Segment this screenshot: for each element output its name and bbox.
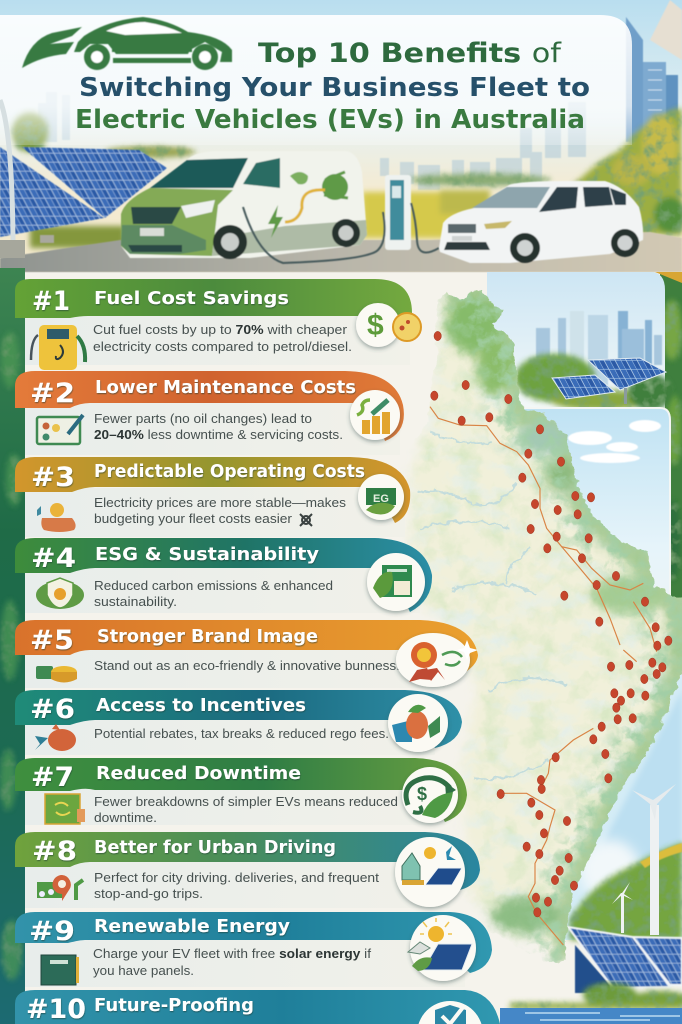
route line [430, 407, 657, 945]
right background scenery [487, 272, 682, 1024]
white car [439, 181, 643, 263]
benefit 6 panel: Potential rebates, tax breaks & reduced rego fees. [94, 726, 389, 741]
benefit 2 panel: #2 [30, 378, 75, 409]
benefit 5 panel: #5 [30, 625, 74, 656]
shrubs [510, 983, 682, 1009]
lower right sky [560, 640, 682, 940]
benefit 1 panel: Fuel Cost Savings [94, 289, 289, 309]
icon: green book [41, 955, 79, 985]
benefit 2 panel: Lower Maintenance Costs [95, 378, 356, 398]
field [30, 190, 490, 248]
charging station [243, 175, 439, 263]
benefit 4 panel: #4 [31, 543, 76, 574]
benefit 4 panel: ESG & Sustainability [95, 545, 320, 565]
map of eastern Australia [406, 290, 682, 964]
icon: check shield [417, 1001, 483, 1024]
benefit 9 panel: Renewable Energy [94, 917, 291, 937]
location pins [431, 331, 672, 917]
benefit 7 panel: #7 [31, 762, 74, 793]
benefit 9 panel: you have panels. [93, 963, 194, 978]
benefit 4 panel: sustainability. [94, 594, 177, 609]
benefit 2 panel: 20–40% less downtime & servicing costs. [94, 427, 343, 442]
benefit 8 panel: Better for Urban Driving [94, 838, 336, 858]
benefit 5 panel: Stand out as an eco-friendly & innovative bunness. [94, 658, 400, 673]
forest strip on left [0, 268, 25, 1024]
title: Electric Vehicles (EVs) in Australia [75, 105, 585, 135]
icon: green report with leaf [367, 553, 425, 611]
logo: leaf car [22, 17, 232, 70]
right towers [626, 0, 682, 142]
icon: coin stack [36, 666, 77, 682]
benefit 6 panel: #6 [30, 694, 75, 725]
second sky panel [523, 408, 670, 640]
delivery van [121, 151, 367, 259]
benefit 6 panel [15, 690, 462, 755]
benefit 3 panel: budgeting your fleet costs easier [94, 511, 293, 526]
icon: EG tag [358, 474, 404, 520]
icon: dashboard tablet [37, 415, 83, 444]
icon: solar charger [395, 837, 465, 907]
benefit 3 panel: Predictable Operating Costs [94, 462, 365, 482]
benefit 7 panel [15, 758, 467, 825]
icon: piggy bank and coin [37, 503, 76, 532]
benefit 4 panel [15, 538, 432, 613]
icon: small gear [300, 514, 312, 526]
lamp post [0, 100, 13, 240]
benefit 1 panel: #1 [32, 286, 70, 317]
benefit 7 panel: Reduced Downtime [96, 764, 301, 784]
icon: leaf shield [36, 578, 84, 609]
title [75, 38, 590, 135]
icon: EG tag: EG [373, 493, 389, 505]
icon: award rosette [396, 633, 478, 687]
benefit 7 panel: downtime. [94, 810, 157, 825]
title: Top 10 Benefits of [258, 38, 563, 69]
trees on the left and right [12, 108, 682, 235]
water [500, 1008, 682, 1024]
icon: fuel pump [31, 325, 85, 370]
benefit 1 panel: electricity costs compared to petrol/diesel. [93, 339, 352, 354]
benefit 1 panel: Cut fuel costs by up to 70% with cheaper [93, 322, 348, 337]
benefit 8 panel: Perfect for city driving. deliveries, and frequent [94, 870, 379, 885]
icon: dollar and coin [356, 303, 421, 347]
benefit 3 panel: Electricity prices are more stable—makes [94, 495, 346, 510]
lower solar panels [568, 927, 682, 993]
benefit 5 panel: Stronger Brand Image [97, 627, 318, 647]
title: Switching Your Business Fleet to [79, 73, 590, 103]
benefit 1 panel [15, 279, 421, 370]
benefit 3 panel: #3 [31, 462, 75, 493]
icon: recycle arrows with leaf: $ [417, 784, 427, 804]
road [0, 232, 682, 272]
benefit 4 panel: Reduced carbon emissions & enhanced [94, 578, 333, 593]
icon: sun over solar panel [408, 915, 476, 981]
icon: wrench and bars [350, 390, 400, 440]
icon: dollar and coin: $ [367, 309, 384, 342]
green hill [570, 843, 682, 940]
benefit 9 panel: Charge your EV fleet with free solar energy if [93, 946, 371, 961]
benefit 5 panel [15, 620, 478, 688]
benefit 10 panel: Future-Proofing [94, 996, 254, 1016]
sky panel with city and solar [487, 272, 672, 410]
benefit 8 panel [15, 832, 480, 908]
large wind turbine [632, 784, 676, 935]
benefit 10 panel [15, 990, 500, 1024]
icon: mascot with box [388, 694, 448, 752]
benefit 2 panel: Fewer parts (no oil changes) lead to [94, 411, 312, 426]
icon: recycle arrows with leaf [402, 767, 458, 823]
icon: piggy fish [35, 724, 76, 751]
icon: map pin with cars [37, 875, 83, 901]
benefit 2 panel [15, 371, 404, 455]
icon: green certificate [45, 794, 85, 824]
hero illustration [0, 0, 682, 272]
solar panel array [0, 147, 167, 243]
small wind turbine [612, 882, 633, 933]
benefit 9 panel: #9 [29, 916, 75, 947]
benefit 8 panel: stop-and-go trips. [94, 886, 203, 901]
title panel [0, 15, 632, 145]
benefit 9 panel [15, 912, 492, 987]
distant skyline [38, 92, 586, 190]
benefit 3 panel [15, 457, 410, 537]
benefit 7 panel: Fewer breakdowns of simpler EVs means reduced [94, 794, 398, 809]
benefit 8 panel: #8 [32, 836, 77, 867]
benefit 6 panel: Access to Incentives [96, 696, 306, 716]
